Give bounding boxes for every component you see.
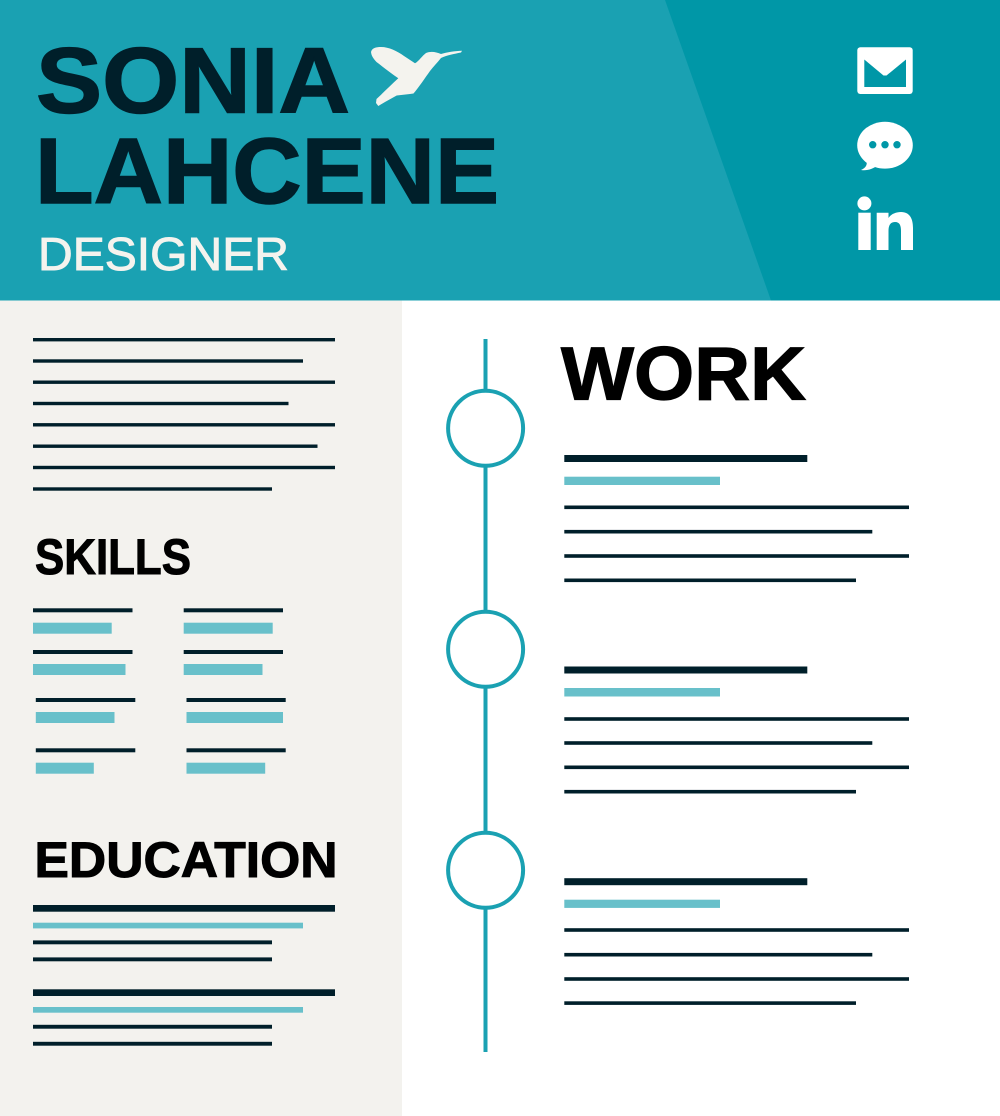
heading: skills: SKILLS: [35, 529, 191, 585]
title: name: SONIA: [36, 29, 350, 133]
icon: hummingbird: [371, 47, 462, 106]
icon: envelope: [857, 47, 913, 94]
panel: header banner: [0, 0, 1000, 300]
education entry one: [33, 905, 335, 961]
subtitle: designer: DESIGNER: [38, 228, 289, 280]
heading: work: WORK: [561, 332, 806, 416]
education entry two: [33, 989, 335, 1046]
timeline: [448, 339, 523, 1052]
heading: education: EDUCATION: [34, 832, 338, 888]
icon: linkedin: [857, 196, 913, 250]
work entry one: [564, 455, 909, 582]
skill bars: [33, 608, 286, 774]
text block: summary lines: [33, 338, 335, 491]
work entry two: [564, 666, 909, 794]
work entry three: [564, 878, 909, 1005]
panel: left sidebar: [0, 300, 402, 1116]
title: name: [35, 29, 499, 223]
title: name: LAHCENE: [35, 119, 499, 223]
icon: speech bubble: [857, 122, 913, 170]
